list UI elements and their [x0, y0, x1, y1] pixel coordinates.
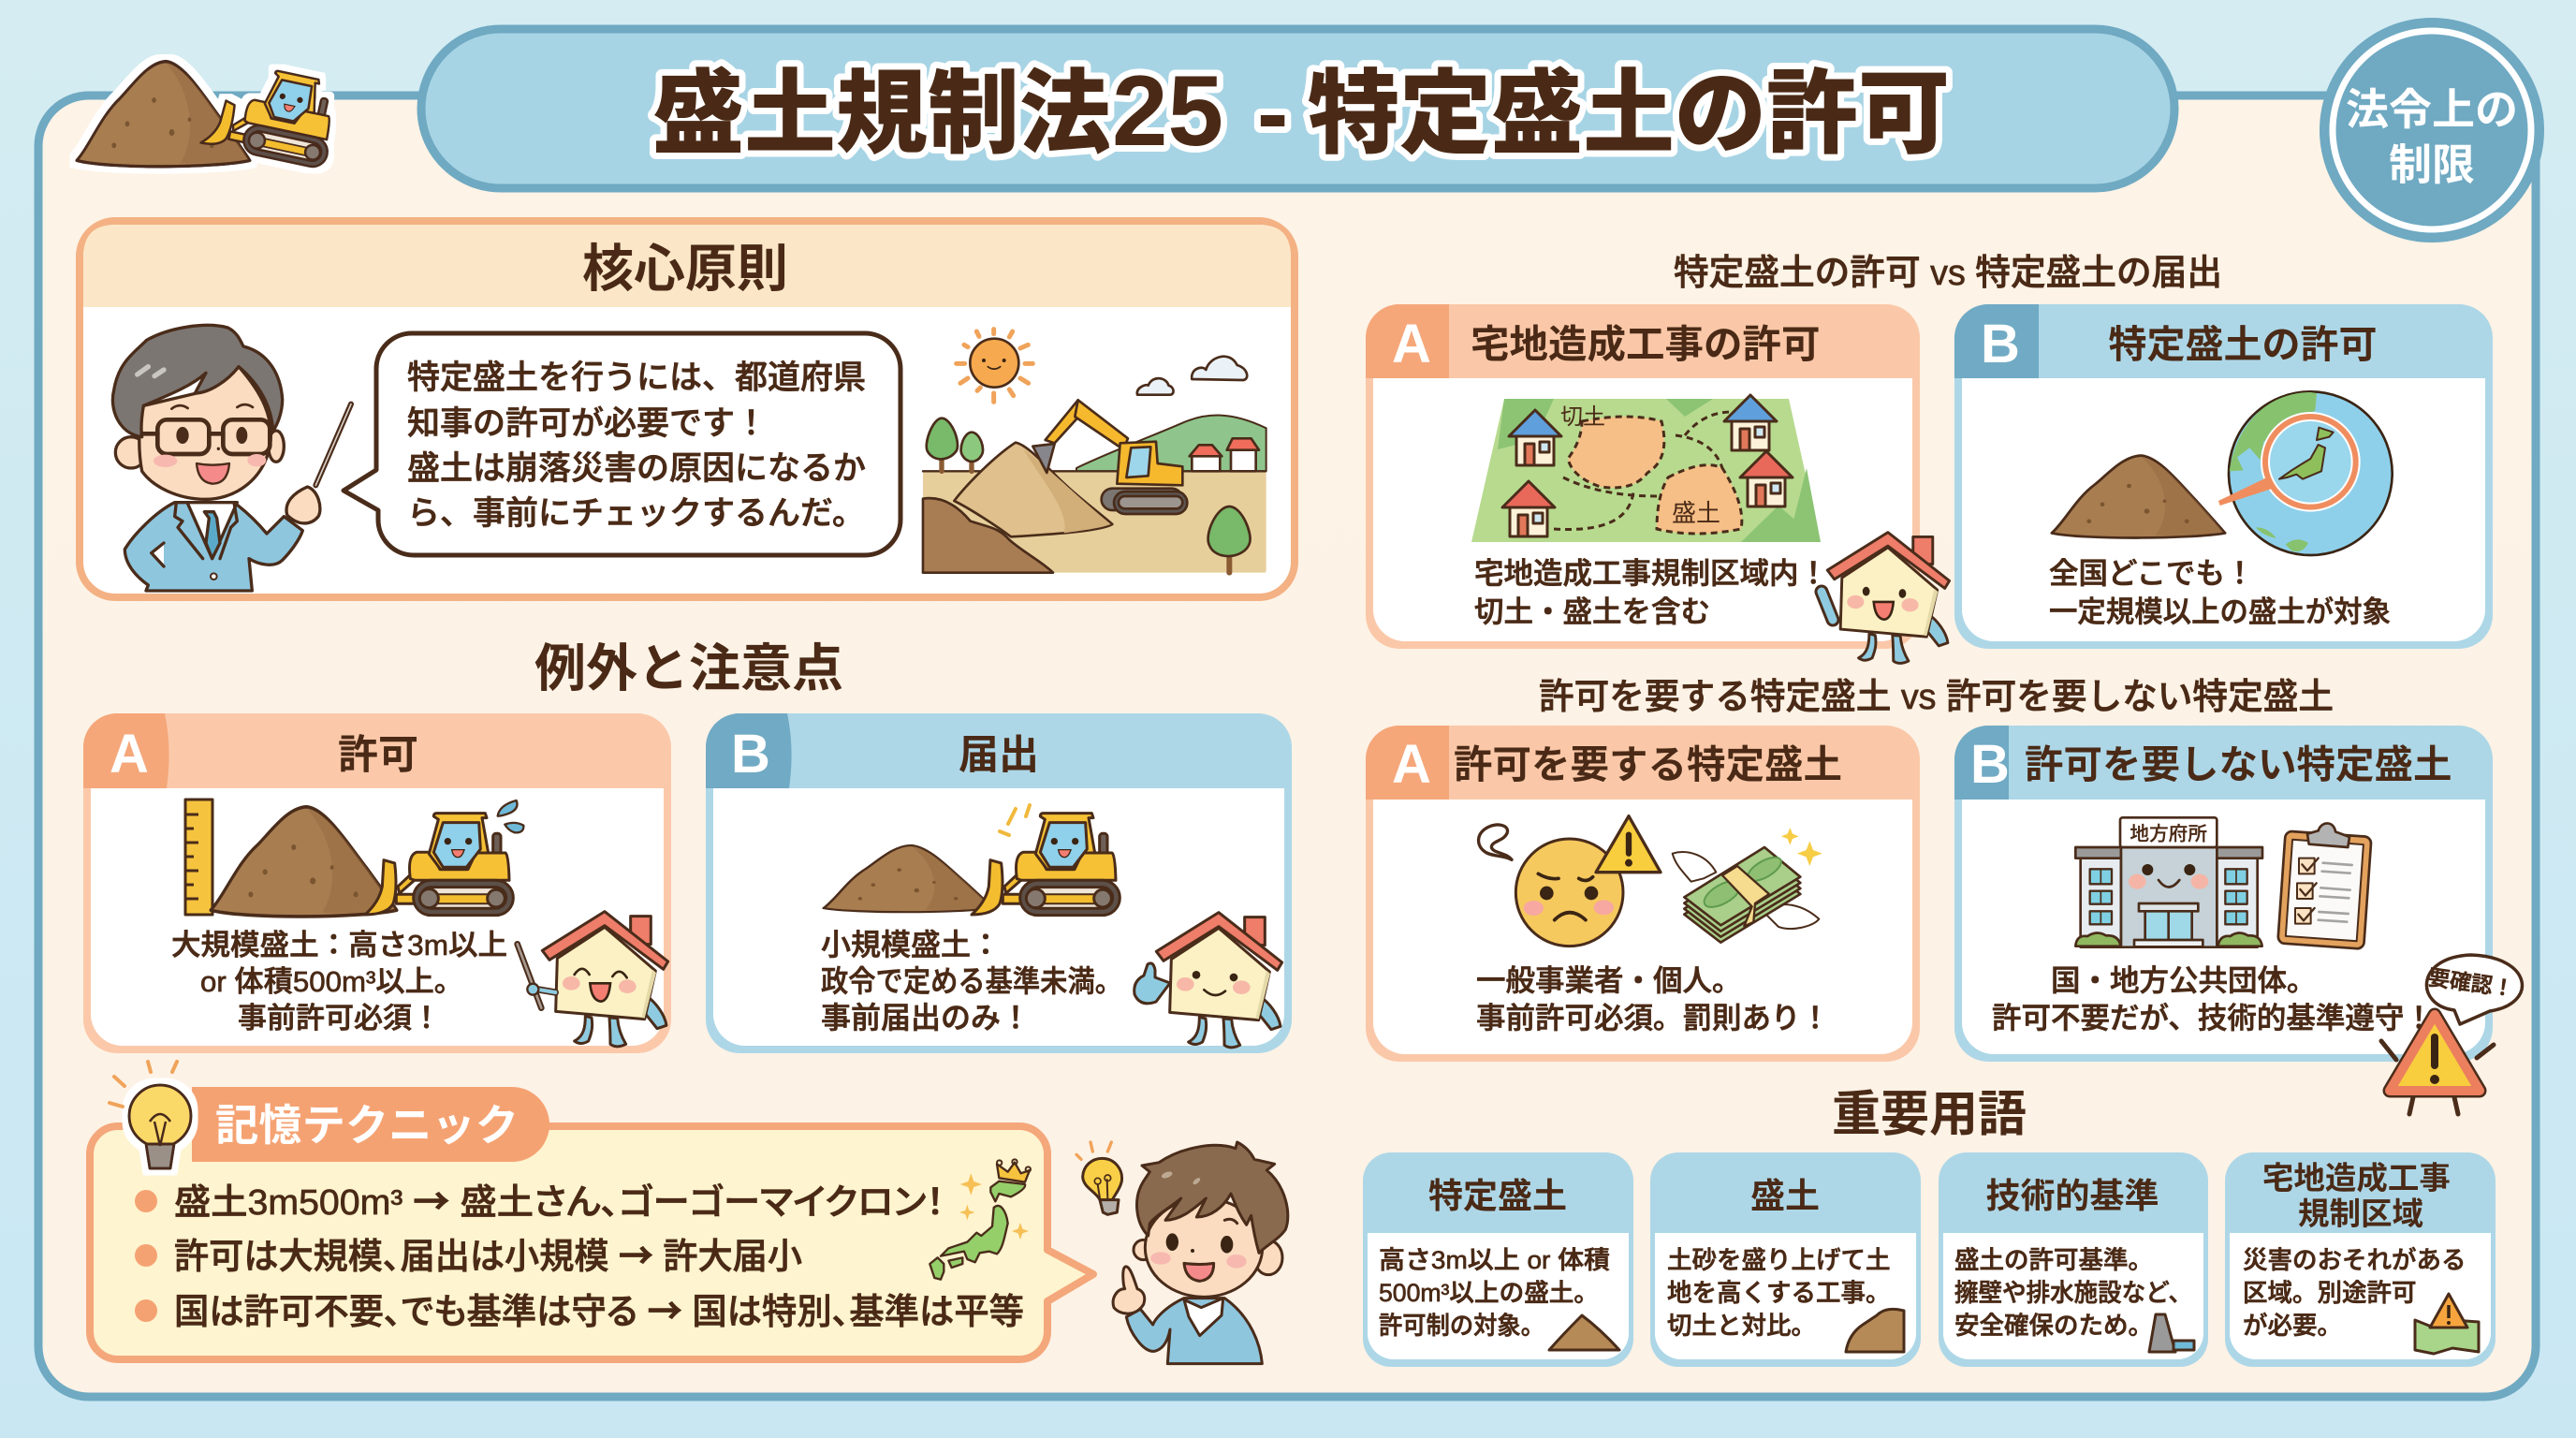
bubble text: ら、事前にチェックするんだ。	[407, 495, 865, 532]
card: fill	[1650, 1152, 1921, 1367]
heading: key terms: 重要用語	[1832, 1088, 2027, 1142]
badge letter A: A	[1392, 734, 1431, 795]
category badge: 制限	[2389, 140, 2475, 189]
heading: core principle: 核心原則	[582, 240, 788, 298]
panel text: 全国どこでも！	[2049, 556, 2255, 590]
map label: 盛土	[1672, 499, 1720, 527]
panel heading: 許可を要しない特定盛土	[2025, 742, 2452, 786]
panel heading: 宅地造成工事の許可	[1471, 322, 1821, 366]
panel text: 切土・盛土を含む	[1474, 594, 1710, 628]
house mascot	[1822, 533, 1950, 663]
card text: 高さ3m以上 or 体積	[1379, 1246, 1610, 1274]
icon: small light bulb	[1076, 1142, 1122, 1214]
panel text: 事前届出のみ！	[821, 1001, 1031, 1034]
category badge	[2320, 18, 2544, 242]
panel text: 国・地方公共団体。	[2051, 963, 2317, 997]
worried face	[1479, 825, 1623, 946]
clipboard checklist	[2277, 823, 2371, 949]
badge letter B: B	[731, 724, 770, 785]
bullets	[135, 1190, 157, 1322]
teacher character	[112, 325, 351, 591]
bubble text: 知事の許可が必要です！	[407, 405, 768, 442]
card text: 土砂を盛り上げて土	[1667, 1246, 1891, 1274]
bulb rays	[110, 1062, 177, 1107]
globe with magnifier	[2218, 391, 2393, 555]
speech bubble	[344, 333, 900, 555]
badge text: 法令上の	[2346, 85, 2518, 134]
panel text: or 体積500m³以上。	[200, 965, 463, 998]
heading: comparison 2: 許可を要する特定盛土 vs 許可を要しない特定盛土	[1539, 678, 2334, 717]
panel: A permit required	[1366, 726, 1920, 1062]
card text: 安全確保のため。	[1954, 1312, 2153, 1340]
card text: 地を高くする工事。	[1667, 1279, 1891, 1307]
card text: 盛土の許可基準。	[1954, 1246, 2153, 1274]
japan map with crown	[929, 1159, 1031, 1280]
heading: exceptions: 例外と注意点	[534, 639, 843, 697]
icon: warning on map	[2415, 1294, 2479, 1354]
title: -	[1257, 61, 1288, 166]
panel text: 事前許可必須！	[238, 1002, 441, 1034]
bubble text: 特定盛土を行うには、都道府県	[407, 360, 866, 396]
panel: B permit not required	[1954, 726, 2493, 1062]
panel: A residential permit	[1366, 304, 1950, 663]
icon: soil pile and bulldozer	[77, 58, 342, 169]
panel: core principle	[80, 221, 1295, 597]
icon: light bulb	[129, 1085, 191, 1168]
construction site illustration	[923, 330, 1266, 573]
building sign: 地方府所	[2130, 823, 2207, 844]
card text: 許可制の対象。	[1379, 1312, 1544, 1340]
small soil pile	[824, 845, 993, 912]
title: 盛土規制法	[652, 62, 1111, 165]
label text: 記憶テクニック	[215, 1101, 519, 1150]
badge letter B: B	[1970, 734, 2010, 795]
title: 特定盛土の許可	[1308, 62, 1950, 165]
sweat drops	[498, 800, 523, 832]
badge letter A: A	[110, 724, 149, 785]
technique text	[174, 1173, 1024, 1334]
technique text: 国は許可不要、でも基準は守る → 国は特別、基準は平等	[174, 1283, 1024, 1334]
boy character	[1113, 1142, 1288, 1364]
panel text: 事前許可必須。罰則あり！	[1476, 1001, 1830, 1034]
card text: 切土と対比。	[1667, 1312, 1816, 1340]
technique text: 盛土3m500m³ → 盛土さん、ゴーゴーマイクロン！	[174, 1173, 944, 1225]
panel heading: 許可を要する特定盛土	[1454, 742, 1842, 786]
panel: B specified soil permit	[1954, 304, 2493, 649]
card text: が必要。	[2243, 1312, 2342, 1340]
callout: needs confirmation: 要確認！	[2427, 965, 2515, 1001]
card text: 災害のおそれがある	[2243, 1246, 2466, 1274]
warning icon	[1596, 816, 1661, 873]
panel text: 小規模盛土：	[821, 928, 1001, 961]
card text: 擁壁や排水施設など、	[1954, 1279, 2192, 1307]
title: 25	[1112, 54, 1223, 167]
panel: B notification small	[706, 713, 1292, 1053]
card text: 区域。別途許可	[2243, 1279, 2417, 1307]
panel heading: 届出	[959, 733, 1039, 778]
panel text: 許可不要だが、技術的基準遵守！	[1992, 1001, 2434, 1034]
map label: 切土	[1560, 404, 1605, 430]
regulated area map	[1471, 395, 1821, 542]
ruler icon	[185, 800, 212, 915]
panel text: 政令で定める基準未満。	[821, 964, 1122, 998]
card: technical standards	[1939, 1152, 2208, 1367]
panel text: 大規模盛土：高さ3m以上	[171, 929, 507, 961]
panel heading: 許可	[338, 733, 418, 778]
label pill	[192, 1087, 549, 1162]
card title: 技術的基準	[1986, 1177, 2159, 1215]
panel heading: 特定盛土の許可	[2108, 323, 2378, 366]
spark lines	[1000, 805, 1030, 835]
bulldozer	[972, 814, 1120, 916]
flying money	[1673, 828, 1822, 943]
bulldozer	[365, 814, 513, 916]
government building	[2075, 817, 2262, 947]
card text: 500m³以上の盛土。	[1379, 1279, 1599, 1307]
title banner	[421, 29, 2174, 188]
soil pile	[2052, 456, 2225, 537]
panel text: 宅地造成工事規制区域内！	[1474, 556, 1828, 590]
badge letter B: B	[1981, 314, 2020, 374]
card title: 宅地造成工事	[2262, 1162, 2451, 1196]
warning mascot	[2381, 1015, 2494, 1114]
card title: 規制区域	[2298, 1197, 2423, 1232]
house mascot	[518, 912, 668, 1047]
callout: needs confirmation	[2426, 955, 2522, 1024]
panel: memory technique	[90, 1062, 1093, 1359]
badge letter A: A	[1392, 314, 1431, 374]
technique text: 許可は大規模、届出は小規模 → 許大届小	[174, 1227, 802, 1279]
card title: 盛土	[1750, 1177, 1820, 1215]
icon: fill slope	[1846, 1309, 1904, 1352]
card: specified soil	[1363, 1152, 1633, 1367]
card title: 特定盛土	[1428, 1177, 1567, 1215]
icon: retaining wall	[2149, 1314, 2194, 1352]
panel text: 一定規模以上の盛土が対象	[2049, 594, 2391, 628]
card: regulated area	[2225, 1152, 2496, 1367]
panel text: 一般事業者・個人。	[1476, 963, 1742, 997]
heading: comparison 1: 特定盛土の許可 vs 特定盛土の届出	[1674, 254, 2222, 293]
large soil pile	[211, 807, 397, 917]
panel: A permit large	[83, 713, 671, 1053]
icon: soil pile	[1549, 1315, 1619, 1350]
bubble text: 盛土は崩落災害の原因になるか	[407, 450, 866, 487]
house mascot	[1134, 913, 1282, 1048]
